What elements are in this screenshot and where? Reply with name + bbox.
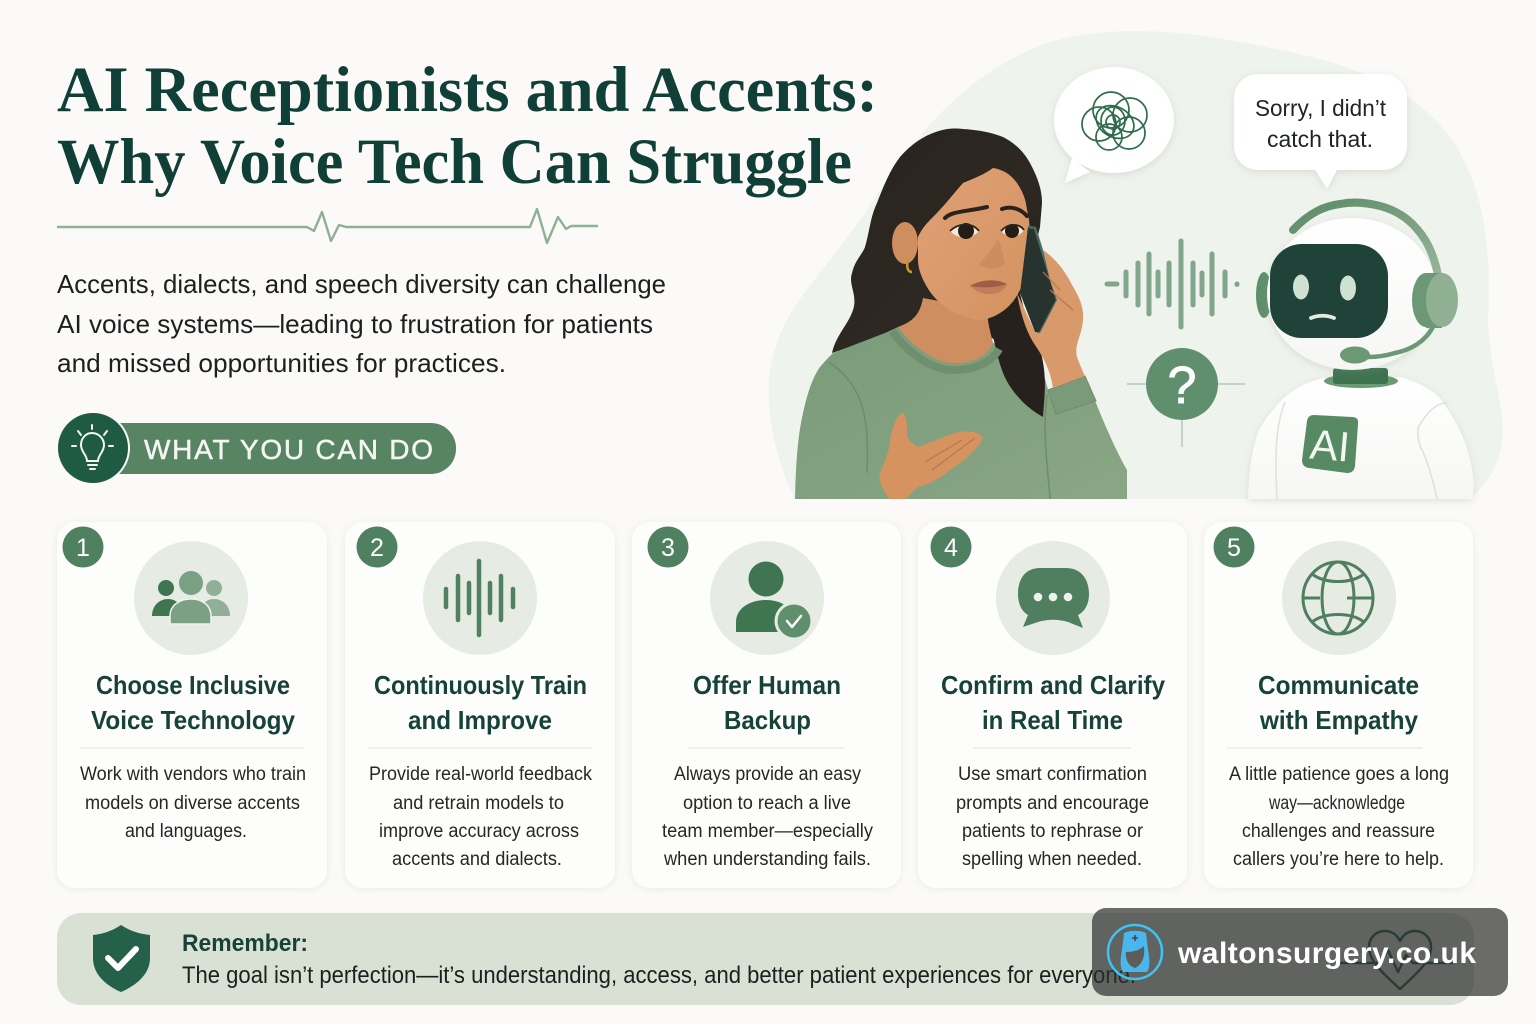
neck	[1324, 374, 1398, 388]
intro paragraph	[57, 269, 666, 378]
body text: challenges and reassure	[1242, 821, 1435, 842]
phone	[1020, 227, 1057, 333]
body text: Always provide an easy	[674, 764, 861, 785]
icon: heart with pulse	[1340, 931, 1453, 989]
heading: Continuously Train	[374, 670, 587, 700]
body text: models on diverse accents	[85, 793, 300, 814]
number badge 4: 4	[944, 534, 958, 562]
body text: and languages.	[125, 821, 247, 842]
question mark circle	[1127, 348, 1245, 447]
brows	[945, 207, 987, 218]
reminder band	[57, 913, 1474, 1005]
number badge 3	[648, 526, 688, 568]
icon: chat bubble	[996, 541, 1110, 655]
right hair strand	[993, 293, 1045, 417]
body	[1248, 377, 1474, 499]
body text: Provide real-world feedback	[369, 764, 592, 785]
heading: Communicate	[1258, 670, 1419, 700]
screen	[1270, 244, 1388, 338]
body text: A little patience goes a long	[1229, 764, 1449, 785]
nose	[979, 238, 1005, 268]
sweater cuff	[1048, 376, 1096, 414]
phone hand	[1017, 250, 1085, 388]
body text: way—acknowledge	[1268, 793, 1405, 814]
number badge 2	[356, 526, 398, 568]
woman	[795, 128, 1127, 499]
title: AI Receptionists and Accents:	[57, 54, 878, 126]
number badge 2: 2	[370, 534, 384, 562]
body text	[369, 764, 592, 870]
speech bubble: tangled scribble	[1054, 67, 1174, 183]
icon: person with check	[710, 541, 824, 655]
mic	[1368, 327, 1433, 357]
head	[1267, 218, 1437, 370]
icon: tangled knot	[1082, 92, 1147, 150]
heading: and Improve	[408, 705, 552, 735]
icon: group of people	[134, 541, 248, 655]
icon: light bulb	[72, 425, 113, 469]
card 3	[632, 522, 901, 888]
speech bubble: robot: catch that.	[1267, 126, 1373, 152]
body text: when understanding fails.	[663, 849, 871, 870]
background blob	[769, 31, 1503, 499]
speech bubble: robot: Sorry, I didn’t	[1255, 95, 1387, 121]
number badge 1: 1	[76, 534, 90, 562]
body text	[1229, 764, 1449, 870]
section banner: what you can do	[56, 411, 456, 485]
watermark: waltonsurgery.co.uk	[1177, 937, 1476, 970]
headband	[1293, 203, 1438, 275]
intro paragraph: Accents, dialects, and speech diversity can challenge	[57, 269, 666, 299]
icon: globe	[1282, 541, 1396, 655]
sweater collar	[892, 331, 999, 370]
heading: Backup	[724, 705, 811, 735]
question mark circle: ?	[1168, 357, 1196, 415]
number badge 1	[62, 526, 104, 568]
body text	[662, 764, 873, 870]
heading	[374, 670, 587, 735]
reminder text: Remember:	[182, 930, 308, 957]
heading: with Empathy	[1259, 705, 1419, 735]
body text: Work with vendors who train	[80, 764, 306, 785]
sound waveform	[1107, 241, 1237, 327]
body text: team member—especially	[662, 821, 873, 842]
heading	[693, 670, 841, 735]
heading: Confirm and Clarify	[941, 670, 1166, 700]
number badge 4	[930, 526, 972, 568]
intro paragraph: AI voice systems—leading to frustration for patients	[57, 309, 653, 339]
body text: improve accuracy across	[379, 821, 579, 842]
body text: spelling when needed.	[962, 849, 1142, 870]
card 2	[345, 522, 615, 888]
reminder text	[182, 930, 1136, 989]
mouth	[970, 280, 1007, 294]
sweater	[795, 327, 1127, 499]
section banner: what you can do: WHAT YOU CAN DO	[144, 434, 433, 465]
heading: in Real Time	[982, 705, 1123, 735]
face	[918, 168, 1030, 320]
icon: shield with check	[93, 925, 150, 992]
heading: Offer Human	[693, 670, 841, 700]
body text: accents and dialects.	[392, 849, 562, 870]
hair back	[832, 128, 1042, 353]
ear cup	[1412, 273, 1440, 327]
reminder text: The goal isn’t perfection—it’s understanding, access, and better patient experiences for everyone.	[182, 962, 1136, 989]
title: Why Voice Tech Can Struggle	[57, 126, 852, 198]
number badge 3: 3	[661, 534, 675, 562]
card 5	[1204, 522, 1473, 888]
body text	[80, 764, 306, 842]
robot	[1248, 203, 1474, 499]
heading: Choose Inclusive	[96, 670, 290, 700]
gesturing hand	[879, 413, 983, 499]
number badge 5: 5	[1227, 534, 1241, 562]
body text: callers you’re here to help.	[1233, 849, 1444, 870]
card 1	[57, 522, 327, 888]
illustration: frustrated caller and AI robot	[769, 31, 1503, 499]
body text: option to reach a live	[683, 793, 851, 814]
watermark	[1092, 908, 1508, 996]
left ear cup	[1256, 272, 1272, 318]
chest badge	[1302, 415, 1358, 473]
body text: and retrain models to	[393, 793, 564, 814]
eyes	[950, 225, 979, 237]
heartbeat divider	[57, 209, 598, 243]
neck	[898, 298, 993, 363]
body text	[956, 764, 1149, 870]
heading	[91, 670, 295, 735]
icon: nurse logo	[1108, 925, 1162, 979]
body text: Use smart confirmation	[958, 764, 1147, 785]
heading	[941, 670, 1166, 735]
ear and earring	[892, 222, 918, 264]
robot: AI	[1308, 420, 1352, 471]
number badge 5	[1214, 526, 1254, 568]
heading: Voice Technology	[91, 705, 295, 735]
body text: prompts and encourage	[956, 793, 1149, 814]
icon: sound wave	[423, 541, 537, 655]
body text: patients to rephrase or	[962, 821, 1144, 842]
speech bubble: robot	[1234, 74, 1407, 189]
title	[57, 54, 878, 198]
card 4	[918, 522, 1187, 888]
heading	[1258, 670, 1419, 735]
intro paragraph: and missed opportunities for practices.	[57, 348, 506, 378]
sleeve seams	[828, 362, 1050, 499]
